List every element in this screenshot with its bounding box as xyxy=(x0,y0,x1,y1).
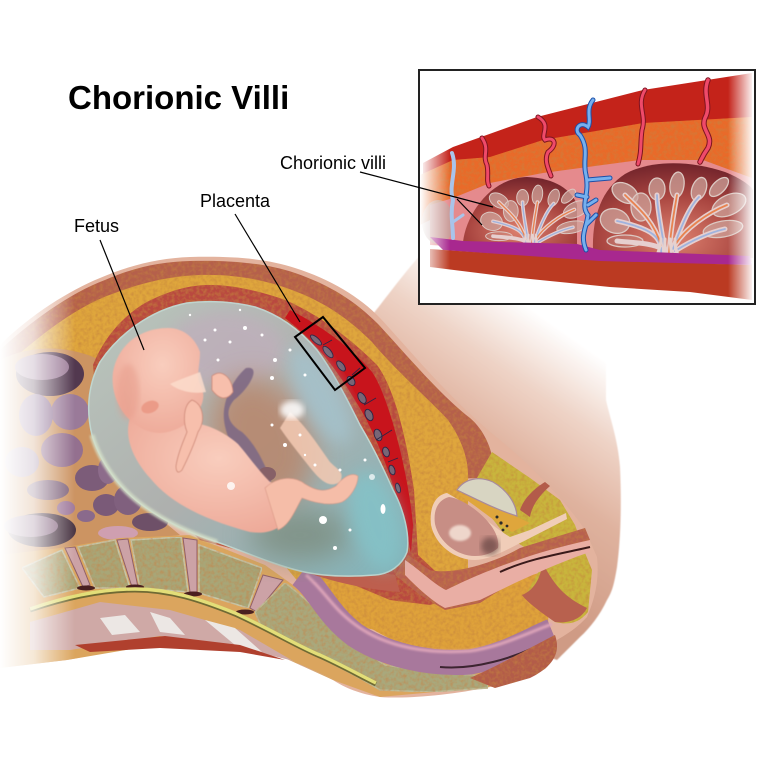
inset frame xyxy=(419,70,755,304)
chorionic villi label: Chorionic villi xyxy=(280,153,386,173)
torso xyxy=(128,418,293,533)
retropubic fat xyxy=(458,494,530,532)
uterine wall xyxy=(93,285,450,605)
raised hand xyxy=(212,373,233,398)
organs: bowel xyxy=(0,348,180,560)
inset: dark red layer xyxy=(423,73,752,175)
inset: arteries xyxy=(482,80,710,186)
placenta label: Placenta xyxy=(200,191,271,211)
vertebrae xyxy=(22,537,262,608)
chorionic villi label xyxy=(280,153,493,225)
spine xyxy=(0,535,490,697)
inset: veins xyxy=(452,100,610,250)
arm and hand xyxy=(176,400,203,472)
placenta umbilical cord xyxy=(224,368,271,483)
fetus label: Fetus xyxy=(74,216,119,236)
muscle layer of abdominal wall xyxy=(0,261,494,480)
fat below uterus xyxy=(300,545,550,656)
inset: pink decidua xyxy=(430,160,752,262)
title: Chorionic Villi xyxy=(68,79,289,116)
anal canal muscle xyxy=(470,635,557,688)
inset: lower red band xyxy=(430,249,752,300)
bladder highlight xyxy=(449,525,471,541)
inset: far left villus xyxy=(423,200,451,244)
spinal processes xyxy=(30,602,340,682)
placenta xyxy=(285,310,413,553)
bladder xyxy=(431,493,567,560)
skin cut edge xyxy=(0,257,598,698)
placenta locator box xyxy=(295,317,365,390)
inset panel: chorionic villi detail xyxy=(419,70,755,304)
sacrum xyxy=(255,583,488,692)
bladder wall xyxy=(431,493,567,560)
inset: right intervillous dome xyxy=(593,163,753,258)
inset: left intervillous dome xyxy=(463,177,577,244)
head xyxy=(113,328,203,433)
pubic bone xyxy=(457,479,517,516)
near leg and foot xyxy=(265,474,358,530)
bladder shadow xyxy=(481,537,499,555)
amniotic sac xyxy=(89,302,411,576)
fetus label xyxy=(74,216,144,350)
fat layer xyxy=(0,275,468,640)
placenta label xyxy=(200,191,300,322)
disc shadows at cord xyxy=(77,586,95,590)
back of head shading xyxy=(117,364,139,420)
uterus lower wall gap xyxy=(300,570,400,592)
cervix and vagina xyxy=(395,528,590,610)
spinal column background xyxy=(0,535,490,697)
inset: orange layer xyxy=(420,117,752,225)
discs xyxy=(65,538,283,612)
face xyxy=(170,372,206,393)
organs: pale fat beside vulva xyxy=(470,452,592,623)
clitoral muscle xyxy=(520,482,550,517)
inset: left fade xyxy=(420,150,449,269)
body: abdomen and thigh skin xyxy=(373,250,621,660)
rectum xyxy=(300,575,552,663)
inset: right fade xyxy=(729,73,753,300)
inset: villus right xyxy=(600,171,746,254)
sac inner glow xyxy=(165,312,285,388)
fetus xyxy=(113,328,358,533)
sagittal section xyxy=(0,250,598,698)
inset: purple band xyxy=(430,237,752,265)
ear xyxy=(139,398,161,416)
far leg xyxy=(280,412,342,484)
white fade on left xyxy=(0,250,75,690)
floating particles xyxy=(189,309,386,550)
muscle fan at perineum xyxy=(522,562,587,622)
bladder lumen xyxy=(435,497,498,556)
inset: villus left xyxy=(480,184,588,243)
spinal cord xyxy=(30,590,376,684)
